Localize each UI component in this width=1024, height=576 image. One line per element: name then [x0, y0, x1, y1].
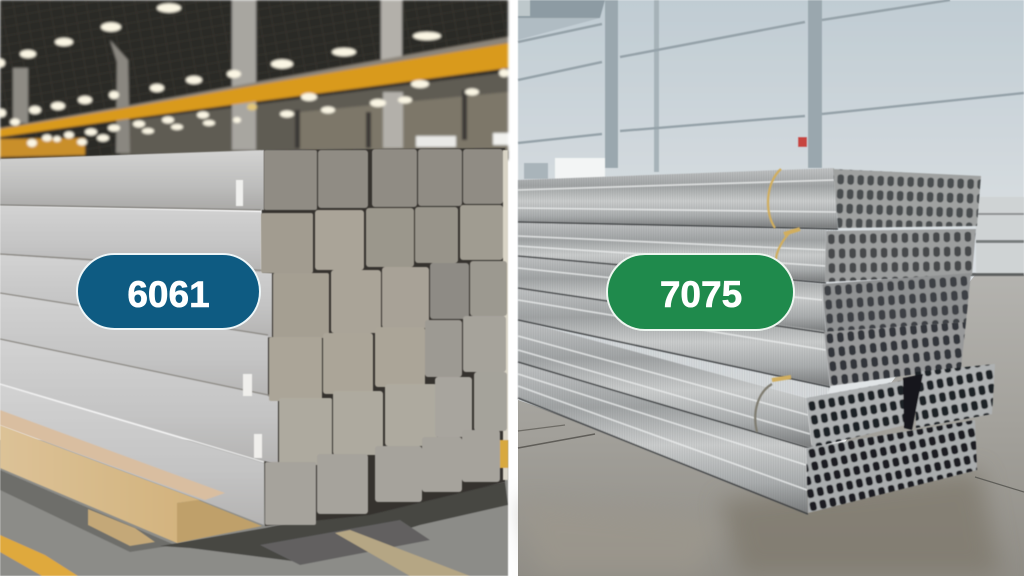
tube bundles: end faces with holes — [806, 169, 995, 513]
wooden pallet beam and block — [0, 425, 262, 546]
warehouse wall with pillars and panel lines — [518, 0, 1024, 410]
panel: 6061 solid aluminium bars — [0, 0, 509, 576]
dark backing behind the bar ends — [261, 148, 505, 526]
twine ties around bundles — [755, 169, 800, 432]
badge label: 7075: 7075 — [660, 274, 742, 315]
badge: 6061 — [77, 254, 260, 329]
concrete floor with seam lines and shadow — [518, 275, 1024, 576]
stack of square bars: long sides — [0, 150, 278, 525]
panel: 7075 hollow aluminium tubes — [518, 0, 1024, 576]
stack of square bars: end faces — [261, 149, 508, 525]
factory floor with yellow lines and shadows — [0, 440, 508, 576]
warehouse background with ceiling, beam, pillars and lights — [0, 0, 509, 160]
far stack of tubes — [970, 197, 1024, 276]
badge: 7075 — [607, 254, 794, 330]
badge label: 6061: 6061 — [127, 274, 210, 315]
tube bundles: long sides — [518, 168, 838, 514]
